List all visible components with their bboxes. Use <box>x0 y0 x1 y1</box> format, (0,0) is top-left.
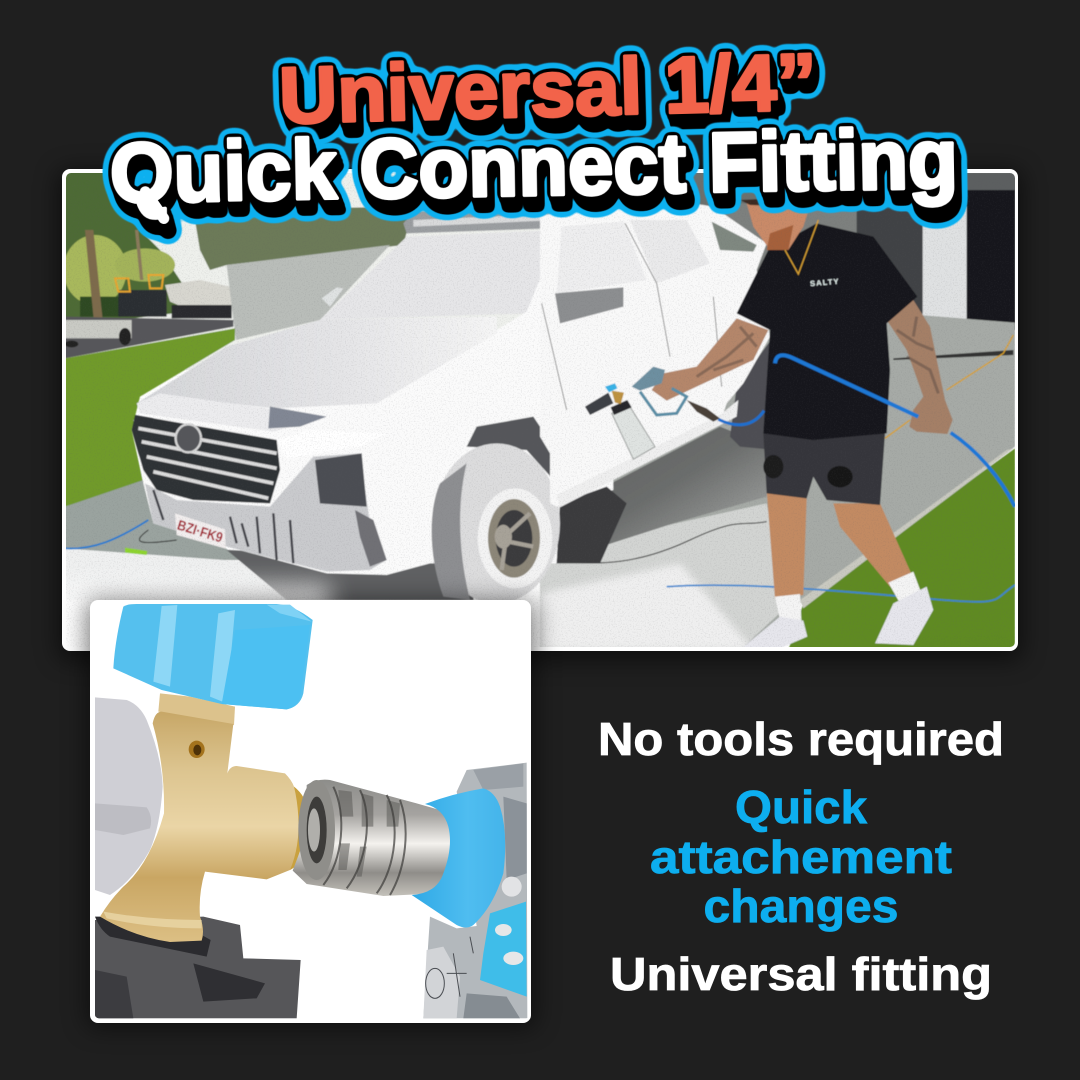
steel quick connect coupling <box>293 780 452 896</box>
blue collar ring <box>412 788 505 927</box>
man's left arm <box>652 318 768 401</box>
benefits text block <box>598 713 1004 1000</box>
yellow extension cable <box>885 335 1013 438</box>
foamed ute front <box>65 205 627 603</box>
foam cannon and hose <box>585 393 613 415</box>
benefit: universal fitting: Universal fitting <box>610 948 992 1000</box>
panel: hero photo of foamed ute and man <box>58 169 1022 660</box>
foam bottle <box>612 407 655 459</box>
benefit: quick attachment changes <box>650 781 952 932</box>
title: Quick Connect Fitting: Quick Connect Fitting <box>109 112 959 220</box>
black t-shirt <box>737 223 917 440</box>
gold necklace <box>785 220 818 274</box>
shoes <box>742 617 807 648</box>
white foam spray <box>69 568 346 600</box>
printed fabric handle <box>423 763 527 1018</box>
man's right arm <box>887 300 953 434</box>
man holding foam cannon <box>585 197 1015 648</box>
legs <box>767 490 807 598</box>
shirt logo: SALTY <box>810 277 840 288</box>
benefit: quick attachment changes: attachement <box>650 831 952 883</box>
number plate: BZI·FK9 <box>176 517 225 546</box>
shorts <box>763 433 885 505</box>
brass tee body <box>158 693 235 725</box>
panel: close-up of quick connect fitting <box>86 600 536 1028</box>
scene: house, driveway and grass <box>540 170 1020 650</box>
thin ground hose <box>667 585 1015 602</box>
black handle base <box>95 917 301 1018</box>
blue knob <box>113 604 313 709</box>
socks <box>775 594 802 625</box>
benefit: quick attachment changes: Quick <box>735 781 867 833</box>
benefit: quick attachment changes: changes <box>704 880 898 932</box>
foamed ute side and rear wheel <box>540 203 775 507</box>
title: Universal 1/4”: Universal 1/4” <box>278 37 818 140</box>
photo grain texture <box>66 173 1015 647</box>
benefit: no tools: No tools required <box>598 713 1004 765</box>
head <box>747 200 812 250</box>
grey foam cannon body <box>95 697 163 895</box>
scene: garden background and road <box>66 173 540 600</box>
